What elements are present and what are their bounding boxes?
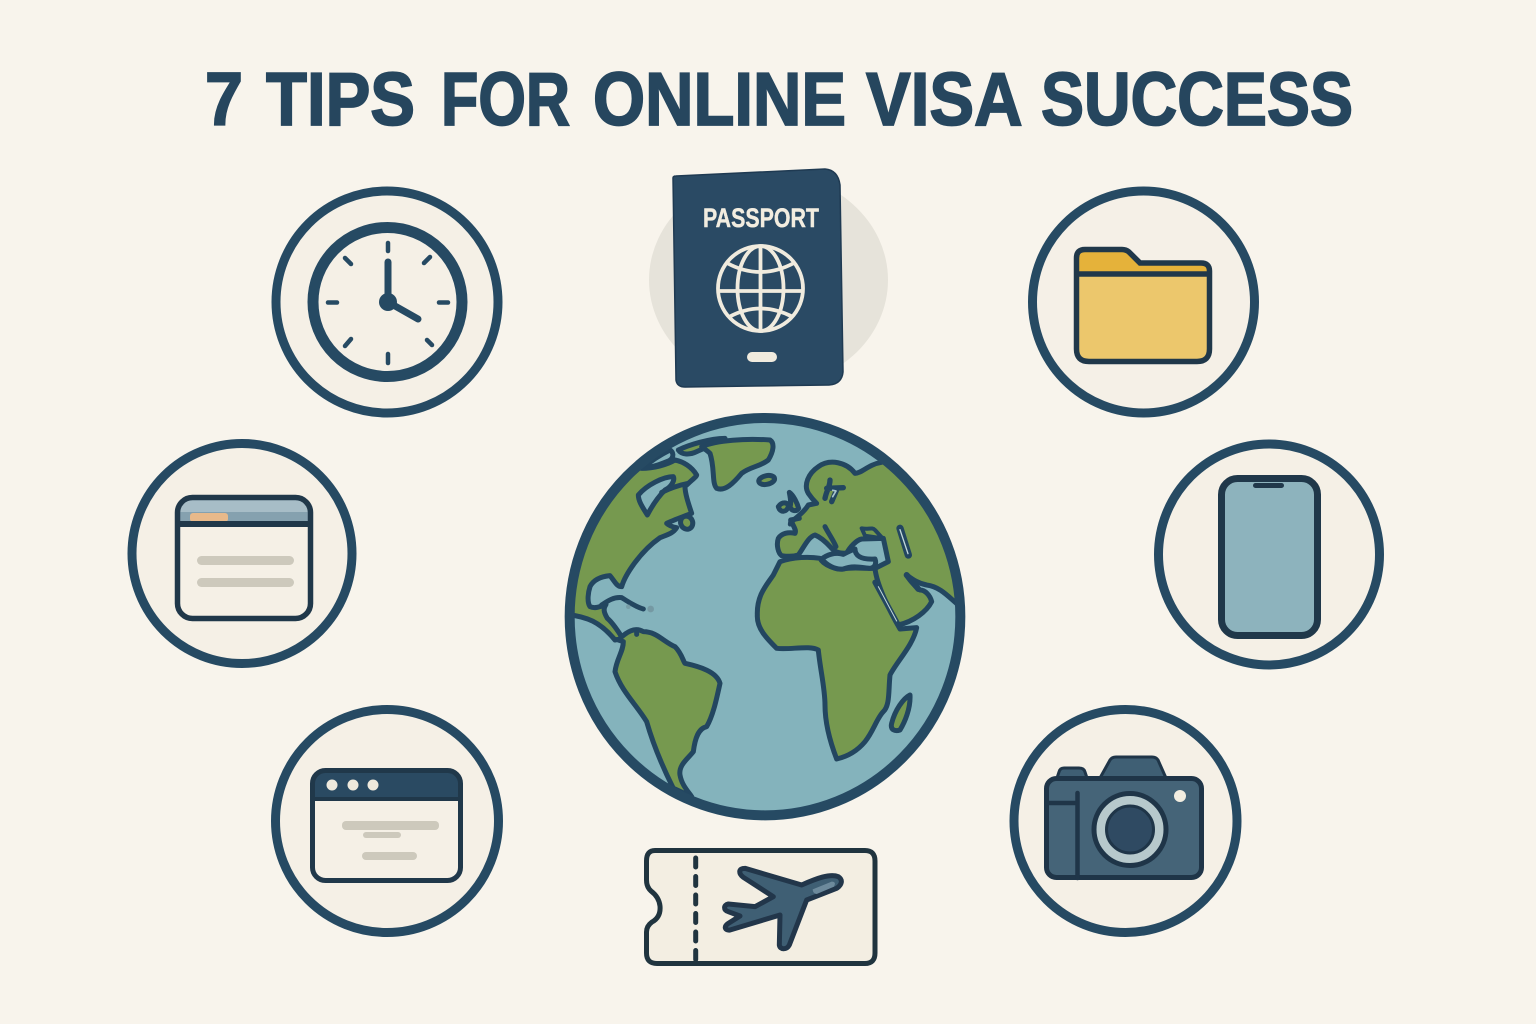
Iceland bbox=[758, 474, 775, 486]
title: ONLINE bbox=[593, 57, 846, 141]
title: VISA bbox=[866, 57, 1021, 141]
icon: plane ticket bbox=[646, 850, 875, 965]
Africa bbox=[757, 557, 917, 759]
title: TIPS bbox=[266, 57, 415, 141]
passport label: PASSPORT bbox=[703, 203, 819, 233]
Arctic islands bbox=[643, 450, 673, 468]
Caribbean bbox=[602, 598, 643, 609]
UK and Ireland bbox=[778, 503, 788, 511]
Madagascar bbox=[891, 695, 910, 731]
icon: smartphone bbox=[1158, 444, 1380, 665]
South America bbox=[615, 630, 720, 797]
Eastern Mediterranean bbox=[822, 549, 876, 569]
infographic canvas bbox=[128, 71, 1384, 966]
plane bbox=[725, 868, 841, 949]
icon: globe bbox=[563, 417, 993, 817]
icon: camera bbox=[1014, 710, 1237, 932]
Eurasia bbox=[774, 460, 955, 626]
Hudson Bay bbox=[638, 477, 674, 515]
title: SUCCESS bbox=[1041, 57, 1353, 141]
icon: browser form with tab bbox=[132, 444, 352, 664]
inland seas bbox=[790, 480, 918, 623]
Newfoundland bbox=[678, 514, 695, 531]
icon: passport bbox=[649, 169, 888, 387]
title: FOR bbox=[441, 57, 570, 141]
icon: browser window bbox=[276, 710, 498, 932]
Greenland bbox=[702, 439, 773, 489]
icon: folder bbox=[1032, 191, 1254, 413]
North America bbox=[563, 460, 697, 640]
ticket perforation bbox=[693, 858, 698, 965]
icon: clock bbox=[276, 191, 498, 413]
passport globe emblem bbox=[718, 246, 803, 331]
title: 7 bbox=[205, 57, 243, 141]
